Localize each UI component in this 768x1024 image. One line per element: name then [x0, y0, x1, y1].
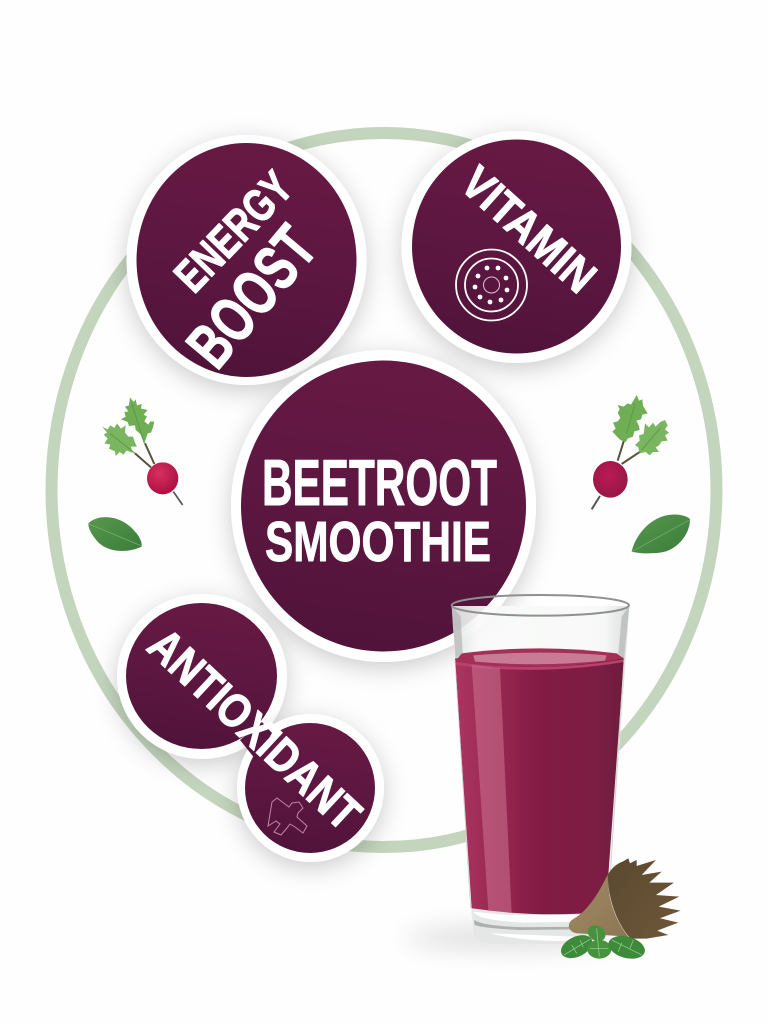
icon: right leaf	[632, 515, 690, 553]
icon: glass of smoothie	[452, 595, 629, 944]
icon: left leaf	[88, 517, 142, 551]
panel: energy boost badge	[126, 135, 366, 385]
highlight	[472, 665, 512, 913]
label: vitamin: VITAMIN	[451, 156, 606, 303]
icon: beet slice	[456, 250, 527, 320]
foam band	[455, 648, 624, 667]
icon: brown seed pod	[569, 858, 681, 939]
glass body	[452, 606, 629, 944]
label: boost: BOOST	[173, 212, 331, 381]
label: antioxidant: ANTIOXIDANT	[138, 618, 372, 841]
glass shadow	[405, 926, 615, 950]
glass base	[472, 906, 608, 944]
juice	[455, 653, 624, 914]
label: energy: ENERGY	[164, 161, 303, 302]
ring: green outline	[52, 133, 716, 847]
panel: central title badge	[231, 350, 536, 662]
icon: antioxidant puzzle cross	[268, 798, 307, 835]
title: beetroot: BEETROOT	[262, 446, 497, 519]
icon: green leaves at base	[557, 922, 647, 963]
rim	[452, 595, 629, 616]
icon: right radish	[592, 395, 669, 509]
title: smoothie: SMOOTHIE	[265, 510, 491, 574]
panel: vitamin badge	[402, 131, 632, 363]
icon: left radish	[102, 397, 183, 505]
panel: antioxidant badges	[117, 594, 384, 862]
